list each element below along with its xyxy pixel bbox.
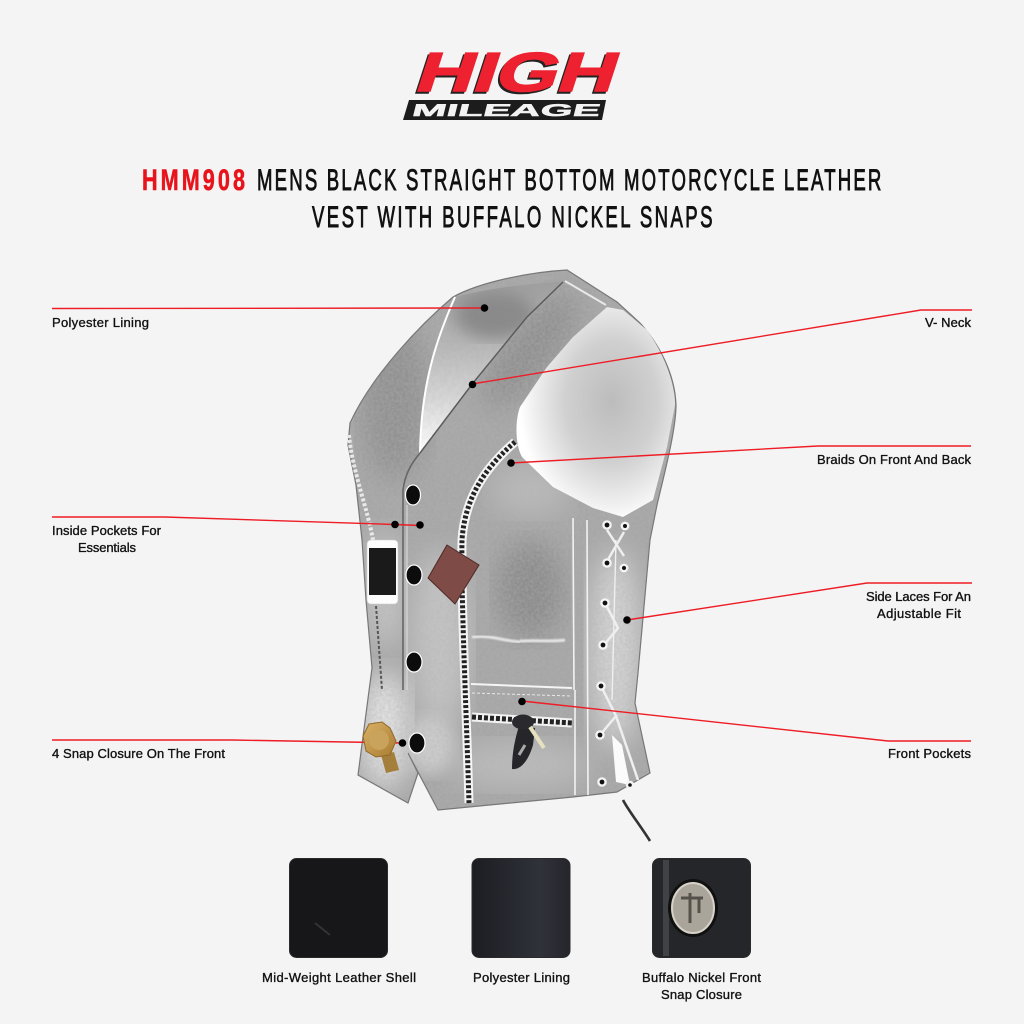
logo: High Mileage bbox=[403, 41, 628, 120]
logo: High Mileage: HIGH bbox=[407, 43, 626, 105]
outline bbox=[348, 270, 676, 810]
callout: side laces bbox=[623, 583, 972, 624]
swatch: buffalo nickel snap: Buffalo Nickel Front bbox=[642, 970, 761, 985]
vest body bbox=[340, 260, 685, 820]
swatch: buffalo nickel snap bbox=[642, 858, 761, 1002]
icon: watch bbox=[363, 722, 399, 773]
braid front vertical bbox=[462, 442, 515, 803]
icon: keys bbox=[512, 714, 544, 769]
callout: polyester lining: Polyester Lining bbox=[52, 315, 149, 330]
callout: 4 snap closure bbox=[52, 739, 406, 761]
side laces and grommets bbox=[596, 521, 650, 841]
callout: inside pockets: Inside Pockets For bbox=[52, 523, 162, 538]
swatch: leather shell: Mid-Weight Leather Shell bbox=[262, 970, 416, 985]
logo: High Mileage: HIGH bbox=[409, 41, 628, 103]
title bbox=[142, 162, 881, 234]
callout: 4 snap closure: 4 Snap Closure On The Front bbox=[52, 746, 225, 761]
callout: front pockets bbox=[518, 698, 972, 761]
seams bbox=[573, 518, 588, 795]
callout: front pockets: Front Pockets bbox=[888, 746, 972, 761]
title: VEST WITH BUFFALO NICKEL SNAPS bbox=[312, 201, 713, 234]
collar strip bbox=[565, 281, 606, 305]
pocket with braid bbox=[471, 684, 572, 723]
snaps bbox=[406, 485, 425, 753]
callout: braids bbox=[507, 446, 972, 467]
callout: side laces: Adjustable Fit bbox=[877, 606, 961, 621]
callout: V-neck bbox=[469, 310, 972, 388]
callout: inside pockets: Essentials bbox=[78, 540, 136, 555]
callout: inside pockets bbox=[52, 517, 424, 555]
callout: V-neck: V- Neck bbox=[925, 315, 972, 330]
swatch: leather shell bbox=[262, 858, 416, 985]
title: MENS BLACK STRAIGHT BOTTOM MOTORCYCLE LEATHER bbox=[257, 164, 881, 197]
swatch: buffalo nickel snap: Snap Closure bbox=[661, 987, 742, 1002]
logo: High Mileage: MILEAGE bbox=[410, 100, 603, 120]
armhole lining bbox=[516, 307, 675, 517]
braid left side bbox=[349, 435, 373, 540]
title: HMM908 bbox=[142, 162, 245, 197]
icon: phone bbox=[367, 540, 398, 604]
callout: braids: Braids On Front And Back bbox=[817, 452, 972, 467]
icon: wallet bbox=[428, 545, 479, 604]
swatch: polyester lining bbox=[472, 858, 570, 985]
callout: polyester lining bbox=[52, 304, 488, 330]
swatch: polyester lining: Polyester Lining bbox=[473, 970, 570, 985]
front seam bbox=[403, 453, 420, 690]
vest illustration bbox=[340, 260, 685, 841]
inner back neck lining bbox=[421, 282, 559, 450]
wrinkle highlights bbox=[472, 637, 565, 642]
callout: side laces: Side Laces For An bbox=[866, 589, 971, 604]
